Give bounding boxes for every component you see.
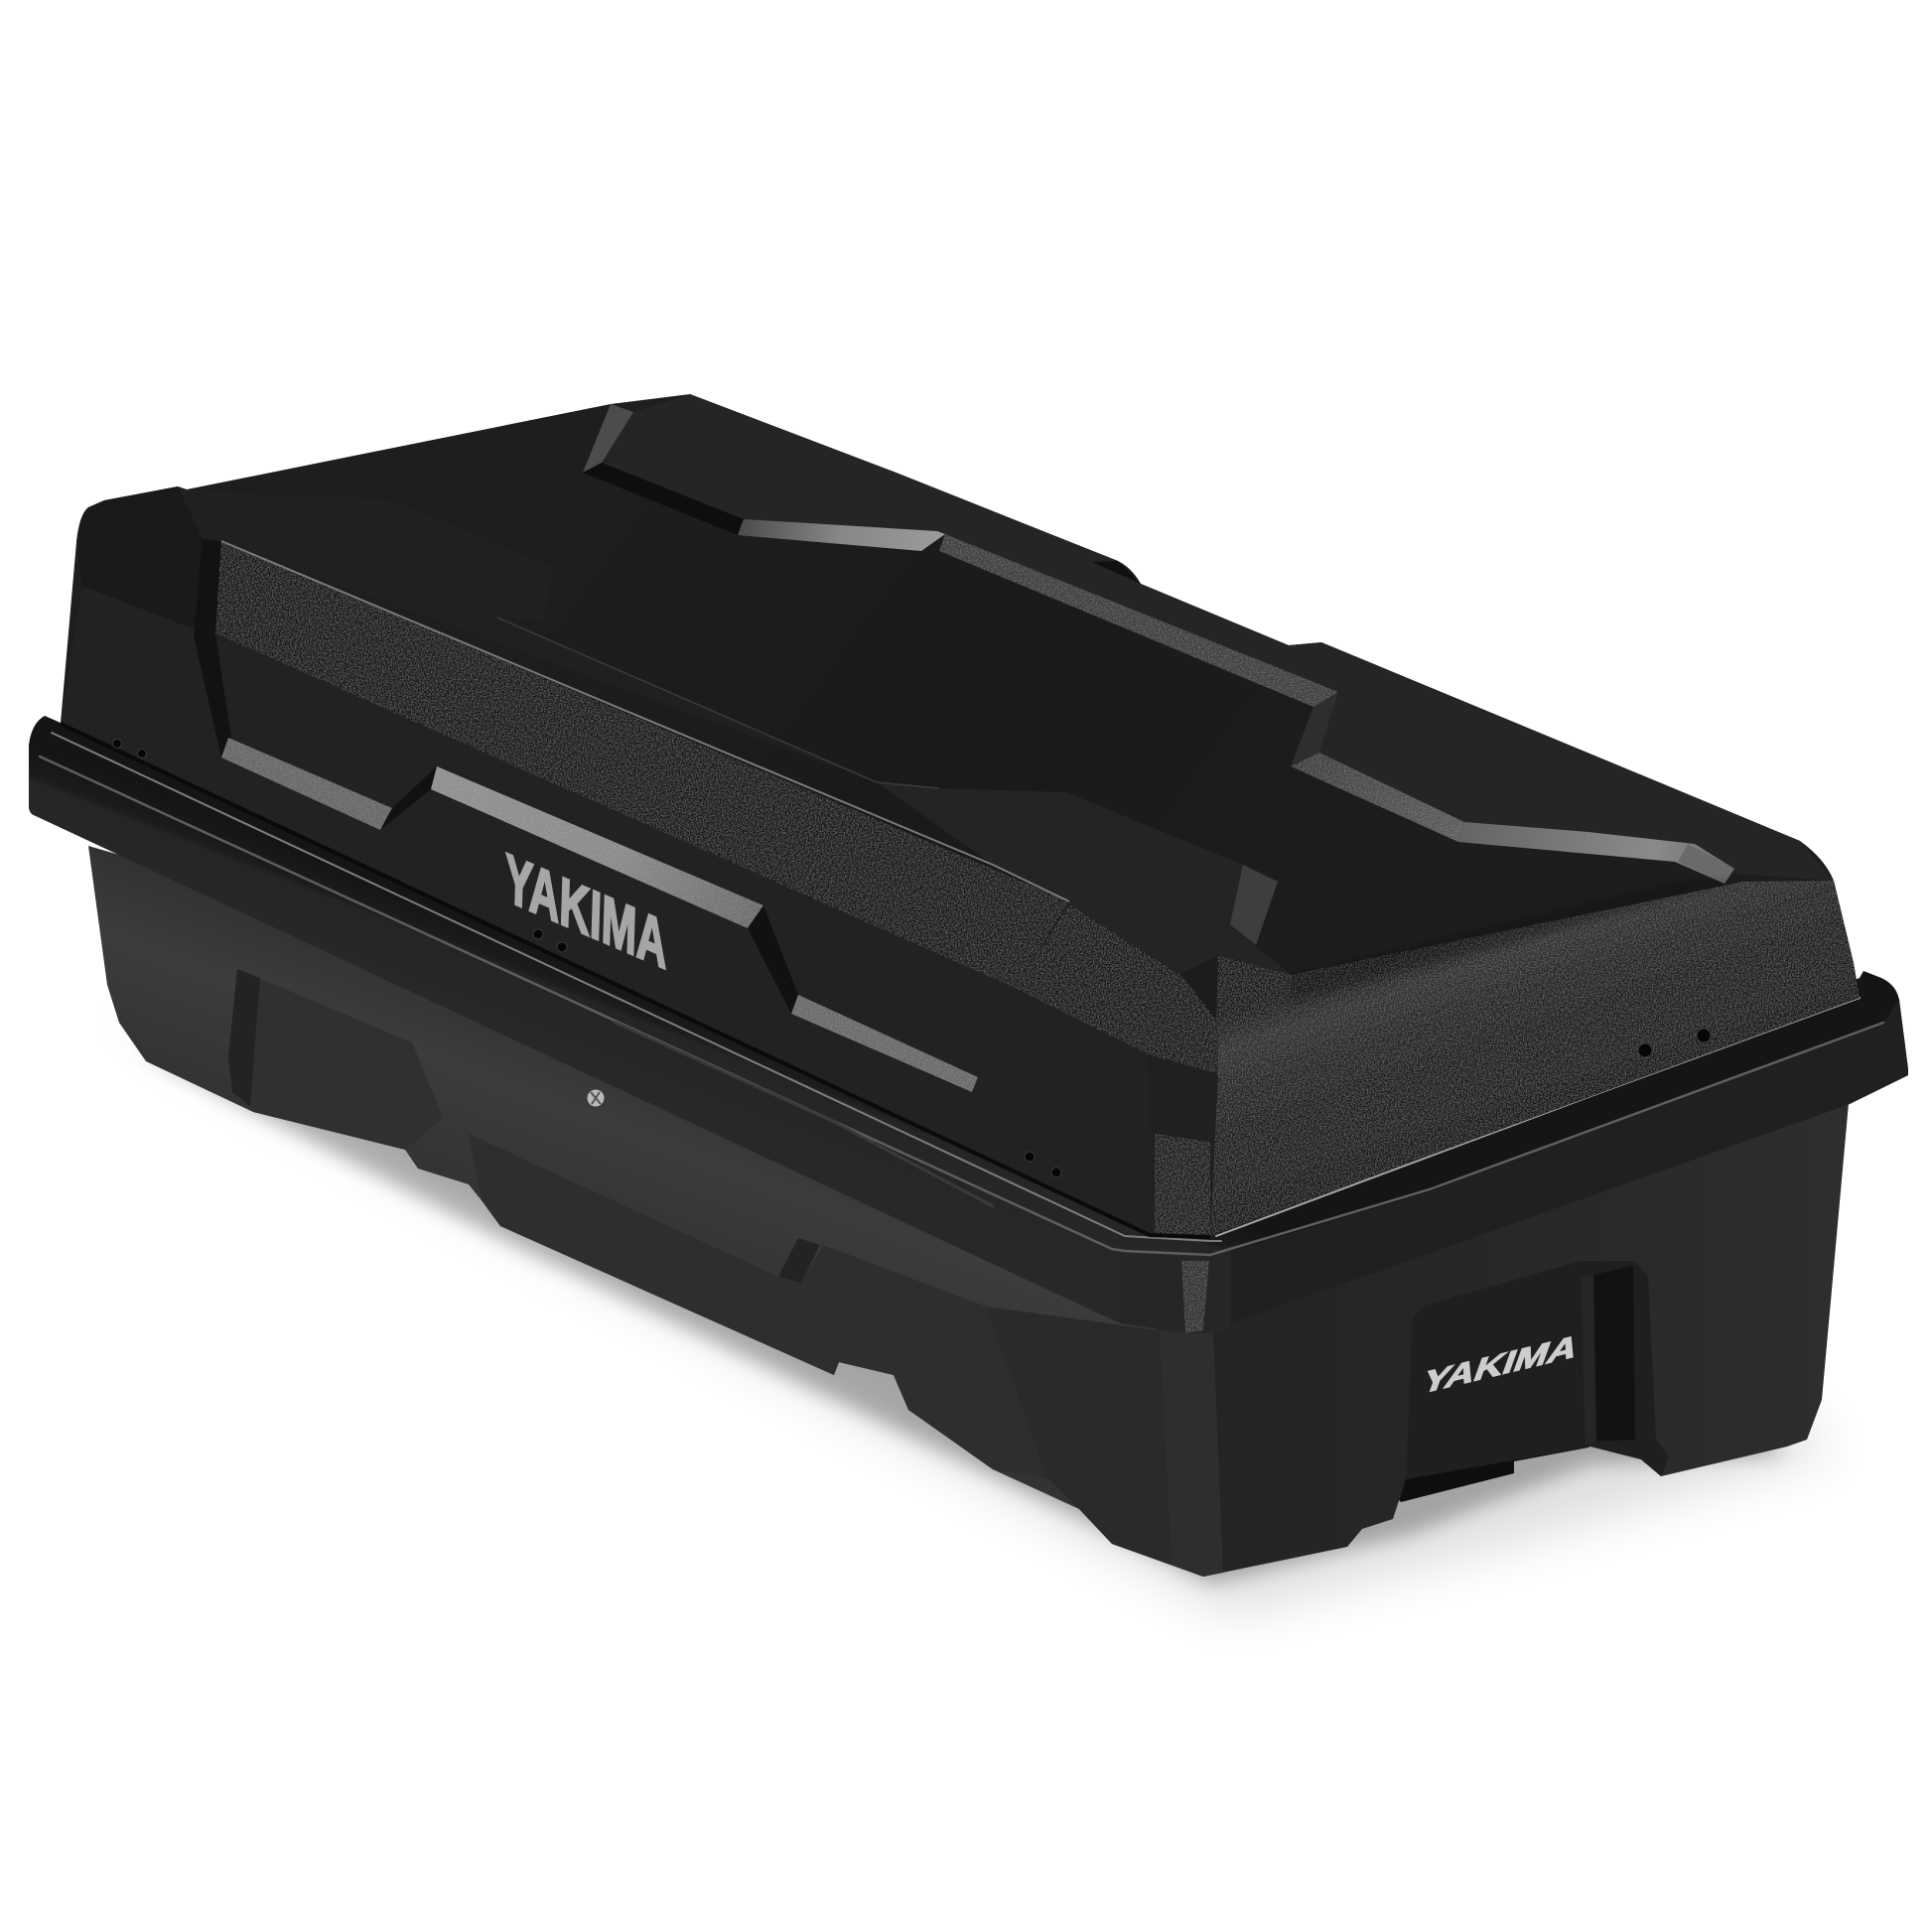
lid bottom dark seam: [61, 724, 1210, 1237]
tub black foot: [1390, 1390, 1588, 1502]
large YAKIMA side logo: YAKIMA: [504, 840, 668, 984]
cargo box: [29, 394, 1908, 1577]
lid: upper shell: [61, 394, 1860, 1237]
raised left lid panel: [178, 486, 877, 782]
textured ridge band: [215, 541, 1069, 988]
corner shading: [1291, 879, 1743, 1003]
lid back strip: [602, 394, 1834, 881]
raised front lid panel: [877, 782, 1291, 975]
lid silhouette: [61, 394, 1860, 1236]
lid left side panel: [61, 586, 1155, 1234]
rim silhouette: [29, 716, 1908, 1333]
tub front right face: [1155, 1092, 1850, 1577]
lid left corner block: [76, 486, 215, 633]
lid right end face: [1210, 881, 1860, 1236]
rim highlight lines: [40, 733, 1883, 1255]
ground shadow: [109, 1013, 1837, 1613]
left crease facet: [194, 539, 231, 758]
tub: lower body: [88, 846, 1850, 1577]
rim right face: [1216, 1000, 1908, 1323]
tub left face: [88, 846, 1231, 1577]
tub corner facet: [1160, 1330, 1223, 1577]
rivets: [113, 739, 1711, 1177]
rim corner: [1120, 1246, 1231, 1333]
corner vertical strip: [1148, 1054, 1218, 1236]
ridge top highlight: [221, 541, 1069, 901]
rim: lip between lid and tub: [29, 716, 1908, 1333]
lid crease line: [497, 618, 939, 788]
tub hitch recess: [1406, 1261, 1669, 1479]
front corner block: [1015, 904, 1218, 1074]
gray bevels on side panel: [221, 738, 978, 1092]
tub end region left of corner: [986, 1307, 1203, 1577]
lock screw: [588, 1090, 604, 1106]
small YAKIMA logo: YAKIMA: [1417, 1328, 1584, 1402]
tub side panel recess: [228, 969, 1047, 1478]
top handle bevels: [583, 404, 1734, 945]
tub tick mark: [778, 1238, 820, 1283]
